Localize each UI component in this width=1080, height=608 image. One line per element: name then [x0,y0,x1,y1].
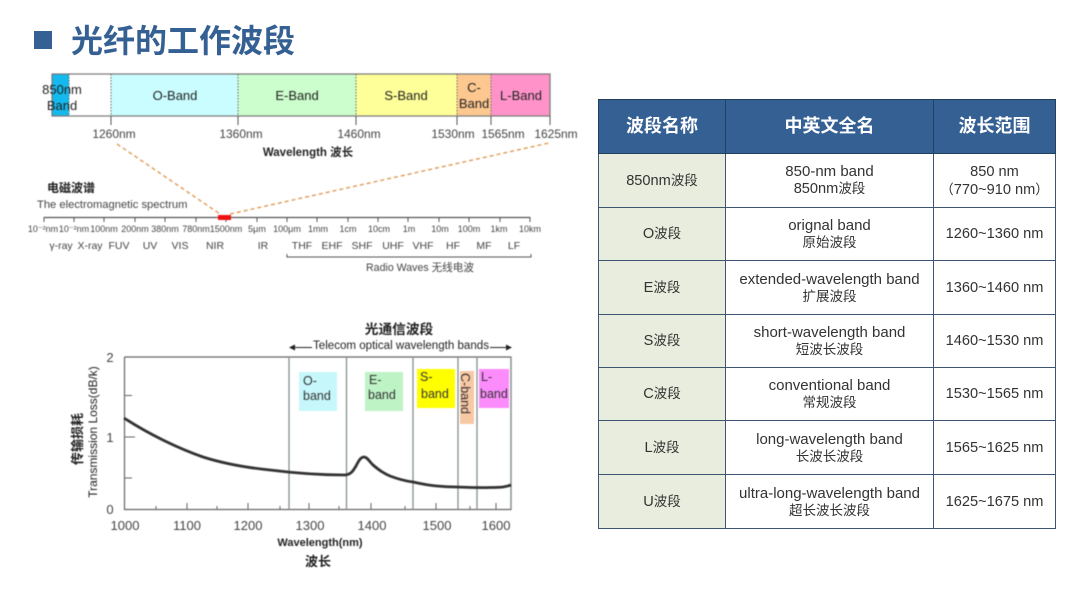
row: C band: 1530~1565 nm [946,386,1043,402]
row: L band [599,421,1043,474]
electromagnetic spectrum scale: IR [258,240,269,252]
title: 光纤的工作波段 [71,23,295,59]
row: 850nm: 850nm波段 [626,172,698,188]
row: U band: U波段 [643,494,681,510]
electromagnetic spectrum scale: HF [446,240,460,252]
electromagnetic spectrum scale: 100nm [90,224,118,234]
band labels: band [368,388,396,402]
title bullet [34,31,52,49]
axis tick labels: 1300 [296,518,324,533]
table header: 中英文全名 [784,116,874,136]
axis tick labels: 1200 [234,518,262,533]
row: C band [599,368,1043,420]
row: 850nm: （770~910 nm） [940,182,1049,198]
axis tick labels [106,350,510,533]
electromagnetic spectrum scale: VIS [172,240,188,252]
electromagnetic spectrum scale: UV [143,240,157,252]
electromagnetic spectrum scale: MF [476,240,492,252]
electromagnetic spectrum scale: 100μm [273,224,301,234]
axis tick labels: 0 [106,502,114,517]
electromagnetic spectrum scale: 780nm [182,224,210,234]
band bar chart: 1565nm [481,127,525,141]
row: O band: orignal band [788,217,871,234]
row: 850nm: 850-nm band [785,163,874,180]
electromagnetic spectrum scale: 1m [403,224,415,234]
wavelength band table [598,99,1056,529]
row: L band: 1565~1625 nm [946,440,1043,456]
electromagnetic spectrum scale: VHF [412,240,434,252]
row: O band: O波段 [643,226,681,242]
row: E band: E波段 [644,280,680,296]
electromagnetic spectrum scale: 380nm [151,224,179,234]
axis tick labels: 1500 [423,518,451,533]
axis tick labels: 2 [106,350,114,365]
row: C band: 常规波段 [802,395,856,410]
electromagnetic spectrum scale: 1cm [339,224,357,234]
row: E band: 1360~1460 nm [946,280,1043,296]
band bar chart: 1530nm [431,127,475,141]
band bar chart: 1360nm [219,127,263,141]
row: S band [599,315,1043,367]
electromagnetic spectrum scale: FUV [108,240,130,252]
band bar chart: S-Band [384,88,428,103]
electromagnetic spectrum scale: LF [508,240,520,252]
electromagnetic spectrum scale: 10⁻²nm [59,224,89,234]
band bar chart: 1625nm [534,127,578,141]
band bar chart: Band [47,98,77,113]
row: O band: 原始波段 [802,235,856,250]
y axis title [70,366,100,498]
band labels: band [421,387,449,401]
electromagnetic spectrum scale: EHF [322,240,342,252]
row: 850nm: 850nm波段 [794,181,865,197]
electromagnetic spectrum scale: X-ray [77,240,103,252]
electromagnetic spectrum scale: 100m [458,224,480,234]
band labels: band [303,389,331,403]
row: 850nm: 850 nm [970,164,1019,180]
row: S band: S波段 [644,333,680,349]
x axis title [277,537,363,569]
band labels: L- [481,370,492,384]
band bar chart: 850nm [42,82,82,97]
electromagnetic spectrum scale: 10cm [368,224,390,234]
band labels: E- [369,373,382,387]
band bar chart: 1260nm [92,127,136,141]
row: E band: extended-wavelength band [739,270,920,288]
band bar chart: C- [467,80,481,95]
electromagnetic spectrum scale: γ-ray [49,240,73,252]
electromagnetic spectrum scale: The electromagnetic spectrum [37,199,187,211]
band labels: O- [303,374,317,388]
band labels: C-band [458,373,472,414]
row: E band: 扩展波段 [802,288,856,304]
electromagnetic spectrum scale: 电磁波谱 [47,180,95,195]
row: U band: 1625~1675 nm [946,494,1043,510]
row: C band: conventional band [769,377,890,394]
row: O band: 1260~1360 nm [946,226,1043,242]
row: L band: long-wavelength band [756,430,903,448]
band labels [299,369,509,424]
band bar chart [42,74,578,159]
band bar chart: L-Band [500,88,542,103]
electromagnetic spectrum scale [28,180,541,274]
electromagnetic spectrum scale: Radio Waves 无线电波 [366,261,474,274]
row: E band [599,261,1043,314]
electromagnetic spectrum scale: 1500nm [210,224,242,234]
row: O band [599,208,1043,260]
electromagnetic spectrum scale: 10m [431,224,449,234]
electromagnetic spectrum scale: 200nm [121,224,149,234]
band labels: band [480,387,508,401]
electromagnetic spectrum scale: THF [292,240,312,252]
band bar chart: E-Band [275,88,319,103]
band bar chart: Wavelength 波长 [263,145,354,159]
y axis title: 传输损耗 [70,413,85,465]
chart heading: Telecom optical wavelength bands [313,340,489,352]
band bar chart: Band [459,96,489,111]
band labels: S- [420,370,432,384]
axis tick labels: 1600 [482,518,510,533]
table header [599,100,1055,528]
dashed zoom lines [117,143,549,214]
row: U band: 超长波长波段 [789,502,870,518]
loss curve [124,418,511,488]
axis tick labels: 1000 [111,518,139,533]
electromagnetic spectrum scale: 1mm [308,224,328,234]
x axis title: 波长 [305,554,331,569]
axis tick labels: 1 [106,430,114,445]
x axis title: Wavelength(nm) [277,537,363,549]
table header: 波长范围 [958,116,1030,136]
electromagnetic spectrum scale: NIR [206,240,224,252]
chart heading [289,321,512,352]
row: U band: ultra-long-wavelength band [739,484,920,502]
row: C band: C波段 [643,386,681,402]
axis tick labels: 1400 [358,518,386,533]
row: L band: 长波长波段 [796,448,863,464]
band bar chart: O-Band [153,88,197,103]
electromagnetic spectrum scale: 10⁻²nm [28,224,58,234]
chart heading: 光通信波段 [365,321,434,337]
axes [124,357,511,510]
y axis title: Transmission Loss(dB/k) [86,366,100,498]
row: 850nm [599,154,1049,207]
band bar chart: 1460nm [337,127,381,141]
row: S band: 短波长波段 [796,342,863,357]
electromagnetic spectrum scale: SHF [352,240,372,252]
row: U band [599,475,1043,528]
table header: 波段名称 [626,116,698,136]
row: S band: short-wavelength band [754,324,905,341]
axis tick labels: 1100 [173,518,201,533]
electromagnetic spectrum scale: UHF [382,240,404,252]
row: L band: L波段 [644,440,680,456]
electromagnetic spectrum scale: 1km [490,224,508,234]
electromagnetic spectrum scale: 10km [519,224,541,234]
electromagnetic spectrum scale: 5μm [248,224,266,234]
transmission loss chart [70,321,512,569]
row: S band: 1460~1530 nm [946,333,1043,349]
